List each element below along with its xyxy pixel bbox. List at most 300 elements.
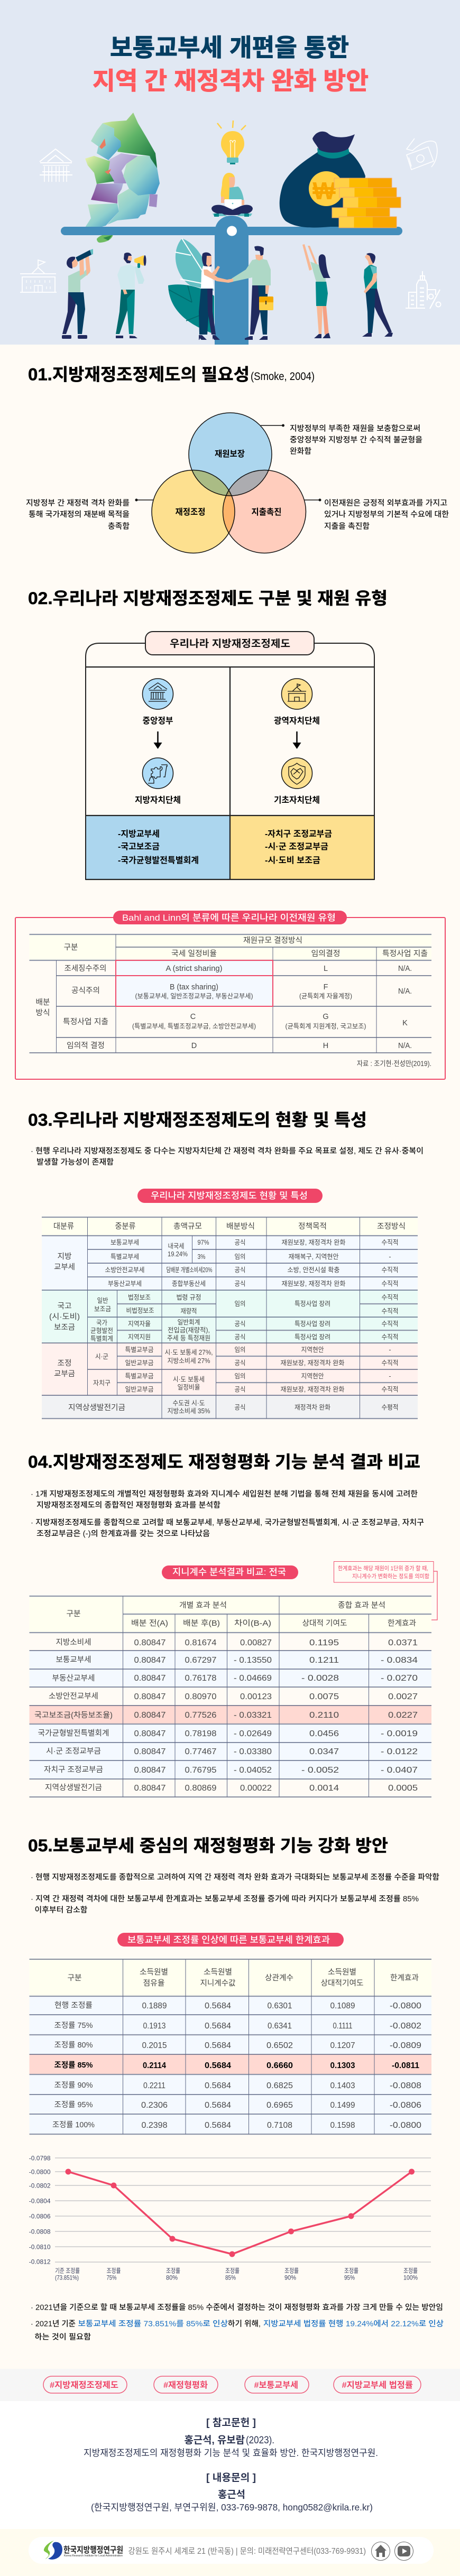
row: 자치구 조정교부금: 0.76795: [185, 1766, 217, 1775]
y axis labels: -0.0806: [29, 2212, 51, 2220]
text block: section 4 description: · 1개 지방재정조정제도의 개별적인 재정형평화 효과와 지니계수 세입원천 분해 기법을 통해 전체 재원을 동시에 고려한: [31, 1489, 418, 1499]
callout: 지출촉진 description: [304, 499, 449, 531]
x axis labels: [55, 2267, 418, 2281]
panel header pill: [113, 911, 347, 924]
row: 조정률 90%: 0.6825: [266, 2081, 293, 2090]
table cells: L: [324, 965, 328, 973]
row: 시·군 조정교부금: 시·군 조정교부금: [46, 1747, 101, 1756]
venn labels: 재원보장: [215, 449, 245, 459]
group: 국고보조금: 특정사업 장려: [295, 1300, 330, 1308]
table header: 배분 전(A): [131, 1619, 168, 1628]
callout: 재정조정 description: 충족함: [108, 522, 130, 531]
row headers: 조세징수주의: [65, 964, 107, 973]
table cells: [132, 965, 412, 1050]
row headers: [36, 964, 108, 1050]
footer: [0, 2529, 460, 2576]
icon: metropolitan government: [281, 679, 312, 709]
callout: 지출촉진 description: 이전재원은 긍정적 외부효과를 가지고: [324, 499, 447, 507]
table header: [67, 1601, 416, 1628]
title: [93, 34, 369, 95]
table cells: H: [323, 1042, 328, 1050]
fill: left funding list: [86, 816, 230, 879]
row: 지방소비세: 0.81674: [185, 1638, 217, 1647]
row: 조정률 75%: 0.1913: [143, 2022, 166, 2031]
text block: section 5 description: · 현행 지방재정조정제도를 종합적으로 고려하여 지역 간 재정력 격차 완화 효과가 극대화되는 보통교부세 조정률 수준을 파악함: [31, 1873, 439, 1882]
table: transfer types: [30, 934, 431, 1053]
table header: 차이(B-A): [234, 1619, 271, 1628]
row: 소방안전교부세: [49, 1692, 418, 1701]
row: 국가균형발전특별회계: 0.0456: [309, 1729, 339, 1738]
list: national funding: [118, 829, 199, 865]
row: 소방안전교부세: 0.0075: [309, 1692, 339, 1701]
group: 지역상생발전기금: 수평적: [382, 1404, 399, 1411]
text block: section 4 description: [31, 1489, 424, 1538]
group: 지방교부세: 수직적: [382, 1266, 399, 1274]
group: 조정교부금: 지역현안: [301, 1373, 324, 1380]
group: 지방교부세: 19.24%: [168, 1250, 188, 1258]
hashtag: 재정형평화: #재정형평화: [163, 2380, 208, 2390]
group: 지역상생발전기금: [68, 1400, 399, 1415]
row: 지방소비세: 0.00827: [240, 1638, 272, 1647]
hashtag: 지방교부세 법정률: #지방교부세 법정률: [342, 2380, 413, 2390]
table header: 상대적기여도: [320, 1979, 364, 1988]
row: 조정률 85% highlighted: 0.2114: [143, 2061, 166, 2070]
table header: 상대적 기여도: [302, 1619, 347, 1628]
row: 현행 조정률: -0.0800: [390, 2002, 421, 2010]
row: 조정률 95%: 0.5684: [205, 2101, 231, 2110]
group: 조정교부금: 공식: [235, 1359, 245, 1367]
row: 보통교부세: - 0.0834: [381, 1656, 418, 1665]
table: Gini analysis results: [30, 1596, 431, 1797]
text block: section 3 description: · 현행 우리나라 지방재정조정제도 중 다수는 지방자치단체 간 재정력 격차 완화를 주요 목표로 설정, 제도 간 유사·중복이: [31, 1147, 424, 1155]
row: 조정률 75%: 0.5684: [205, 2022, 231, 2031]
hashtag: 보통교부세: [245, 2376, 309, 2393]
group: 조정교부금: 특별교부금: [125, 1373, 153, 1380]
section 1 heading: 01.지방재정조정제도의 필요성: [28, 365, 250, 384]
group: 지방교부세: 공식: [235, 1239, 245, 1246]
row: 소방안전교부세: 소방안전교부세: [49, 1692, 98, 1701]
hashtag: 지방재정조정제도: #지방재정조정제도: [50, 2380, 118, 2390]
y axis labels: -0.0812: [29, 2258, 51, 2265]
pill heading: adjustment rate effect: [117, 1933, 344, 1947]
group: 국고보조금: 특정사업 장려: [295, 1333, 330, 1341]
table header: 배분 후(B): [183, 1619, 220, 1628]
list: national funding: -국가균형발전특별회계: [118, 856, 199, 865]
map of Korea: [85, 113, 160, 243]
row: 조정률 100%: 0.5684: [205, 2121, 231, 2130]
group: 조정교부금: -: [389, 1346, 391, 1354]
row: 현행 조정률: 현행 조정률: [54, 2001, 93, 2010]
group: 지역상생발전기금: 공식: [235, 1404, 245, 1411]
table header: 한계효과: [390, 1973, 419, 1982]
row: 지방소비세: 0.1195: [309, 1638, 339, 1647]
row: 현행 조정률: [54, 2001, 421, 2010]
row: 시·군 조정교부금: 0.77467: [185, 1747, 217, 1756]
scale post and beam: [61, 216, 402, 345]
table header: 한계효과: [388, 1619, 416, 1628]
panel: fiscal adjustment system diagram: [86, 632, 374, 879]
hashtag: 보통교부세: #보통교부세: [254, 2380, 298, 2390]
table header: 구분: [68, 1974, 81, 1982]
logo text: 한국지방행정연구원: [63, 2545, 123, 2555]
y axis labels: -0.0804: [29, 2198, 51, 2205]
text block: conclusions: 하기 위해,: [228, 2319, 261, 2329]
y axis labels: -0.0810: [29, 2243, 51, 2250]
table cells: (특별교부세, 특별조정교부금, 소방안전교부세): [132, 1023, 256, 1030]
page background: [0, 345, 460, 2369]
reference citation: (2023).: [246, 2435, 274, 2446]
callout: 지출촉진 description: 있거나 지방정부의 기본적 수요에 대한: [324, 510, 449, 519]
row: 조정률 85% highlighted: 0.5684: [205, 2061, 231, 2070]
x axis labels: 조정률: [344, 2267, 358, 2275]
table cells: (균특회계 자율계정): [299, 993, 352, 1000]
row: 시·군 조정교부금: - 0.03380: [234, 1747, 272, 1756]
table header text: 구분: [63, 943, 78, 952]
logo text: Korea Research Institute for Local Administration: [64, 2554, 123, 2558]
icon: government building outline: [40, 149, 72, 182]
row: 부동산교부세: 0.76178: [185, 1674, 217, 1683]
section 4 heading: 04.지방재정조정제도 재정형평화 기능 분석 결과 비교: [28, 1452, 420, 1471]
group: 국고보조금: 임의: [235, 1300, 245, 1308]
group: 조정교부금: 일반교부금: [125, 1359, 153, 1367]
group: 조정교부금: 시·군: [95, 1353, 108, 1360]
row: 현행 조정률: 0.1089: [330, 2002, 355, 2010]
row: 지역상생발전기금: [45, 1783, 418, 1793]
title: 보통교부세 개편을 통한: [110, 34, 349, 61]
row: 조정률 75%: [54, 2021, 421, 2031]
row: 조정률 95%: -0.0806: [390, 2101, 421, 2110]
row: 부동산교부세: [52, 1674, 418, 1683]
group: 지방교부세: 공식: [235, 1280, 245, 1287]
row: 조정률 90%: 0.1403: [330, 2081, 355, 2090]
table header row: 조정방식: [377, 1222, 406, 1231]
venn labels: 재정조정: [176, 507, 205, 517]
x axis labels: 80%: [166, 2274, 178, 2281]
row: 조정률 80%: 0.1207: [330, 2041, 355, 2050]
row: 조정률 95%: 0.1499: [330, 2101, 355, 2110]
table header: 개별 효과 분석: [179, 1601, 227, 1610]
group: 지역상생발전기금: 지역상생발전기금: [68, 1403, 125, 1412]
group: 조정교부금: 특별교부금: [125, 1346, 153, 1354]
hero background: [0, 0, 460, 345]
pill heading: adjustment rate effect: 보통교부세 조정률 인상에 따른 보통교부세 한계효과: [127, 1935, 330, 1945]
venn diagram: [152, 413, 306, 553]
text block: section 3 description: 발생할 가능성이 존재함: [36, 1157, 114, 1167]
contact details: (한국지방행정연구원, 부연구위원, 033-769-9878, hong0582@krila.re.kr): [91, 2502, 373, 2513]
row: 조정률 80%: 0.6502: [266, 2041, 293, 2050]
table cells: (균특회계 지원계정, 국고보조): [286, 1023, 366, 1030]
group: 국고보조금: 재량적: [181, 1308, 197, 1315]
arrow: metropolitan to basic: [293, 731, 301, 749]
row: 국고보조금 highlighted: 국고보조금(차등보조율): [34, 1711, 113, 1720]
y axis labels: -0.0802: [29, 2182, 51, 2189]
coin bricks: [332, 178, 401, 228]
fill: right funding list: [230, 816, 374, 879]
callout: 재정조정 description: 통해 국가재정의 재분배 목적을: [29, 510, 130, 519]
group: 조정교부금: 시·도 보통세: [173, 1376, 205, 1383]
row: 지역상생발전기금: 0.80869: [185, 1784, 217, 1793]
row: 조정률 85% highlighted: 0.6660: [266, 2061, 293, 2070]
row headers: 특정사업 지출: [63, 1017, 108, 1026]
label: basic government: 기초자치단체: [274, 795, 320, 805]
group: 국고보조금: 특정사업 장려: [295, 1320, 330, 1328]
pill heading: system status: [137, 1189, 323, 1203]
row: 국고보조금 highlighted: - 0.03321: [234, 1711, 272, 1720]
y axis labels: -0.0798: [29, 2154, 51, 2162]
row: 조정률 95%: 0.6965: [266, 2101, 293, 2110]
group: 국고보조금: (시·도비): [49, 1312, 80, 1321]
table cells: N/A.: [398, 965, 412, 973]
row: 국가균형발전특별회계: 0.78198: [185, 1729, 217, 1738]
x axis labels: 100%: [403, 2274, 418, 2281]
table header text: 특정사업 지출: [382, 949, 428, 958]
table header row: 총액규모: [173, 1222, 202, 1231]
row: 조정률 100%: -0.0800: [390, 2121, 421, 2130]
row: 현행 조정률: 0.6301: [268, 2002, 292, 2010]
person: man with megaphone: [116, 253, 146, 338]
section 5 heading: 05.보통교부세 중심의 재정형평화 기능 강화 방안: [28, 1836, 388, 1855]
text block: section 5 description: · 지역 간 재정력 격차에 대한 보통교부세 한계효과는 보통교부세 조정률 증가에 따라 커지다가 보통교부세 조정률 85%: [31, 1894, 419, 1904]
group: 지방교부세: 종합부동산세: [172, 1280, 206, 1287]
row: 조정률 100%: 0.2398: [142, 2121, 168, 2130]
row: 부동산교부세: - 0.04669: [234, 1674, 272, 1683]
group: 지방교부세: 3%: [198, 1253, 205, 1261]
section 3 heading: 03.우리나라 지방재정조정제도의 현황 및 특성: [28, 1110, 367, 1129]
group: 국고보조금: 전입금(재량적),: [168, 1327, 210, 1334]
icon: home button: [371, 2542, 390, 2560]
table header: 소득원별: [140, 1968, 168, 1977]
group: 국고보조금: 보조금: [94, 1305, 111, 1313]
money bag with coin stack: ₩: [312, 177, 336, 205]
group: 조정교부금: 수직적: [382, 1386, 399, 1393]
row: 조정률 90%: -0.0808: [390, 2081, 421, 2090]
group: 지방교부세: 공식: [235, 1266, 245, 1274]
table header: 종합 효과 분석: [338, 1601, 385, 1610]
row: 보통교부세: - 0.13550: [234, 1656, 272, 1665]
row: 부동산교부세: 부동산교부세: [52, 1674, 95, 1683]
group: 조정교부금: 일반교부금: [125, 1386, 153, 1393]
row: 조정률 80%: [54, 2041, 421, 2050]
row: 조정률 75%: 0.1111: [333, 2022, 353, 2031]
hashtag: 지방교부세 법정률: [334, 2376, 421, 2393]
x axis labels: 85%: [225, 2274, 236, 2281]
person: man with briefcase: [227, 246, 273, 340]
table header text: 임의결정: [311, 949, 341, 958]
row: 조정률 95%: [54, 2100, 421, 2110]
leaves behind the post: [168, 238, 214, 334]
table header row: [53, 1222, 406, 1231]
row: 시·군 조정교부금: 0.80847: [134, 1747, 166, 1756]
row: 국가균형발전특별회계: 국가균형발전특별회계: [38, 1729, 109, 1738]
callout: 지출촉진 description: 지출을 촉진함: [324, 522, 370, 531]
row: 국고보조금 highlighted: 0.0227: [388, 1711, 418, 1720]
group: 지방교부세: 소방, 안전시설 확충: [288, 1266, 339, 1274]
venn labels: 지출촉진: [252, 507, 281, 517]
x axis labels: 조정률: [166, 2267, 180, 2275]
group: 조정교부금: 재원보장, 재정격차 완화: [280, 1359, 345, 1367]
table header text: [63, 936, 428, 958]
row: 국가균형발전특별회계: [38, 1729, 418, 1738]
hashtag: 재정형평화: [154, 2376, 218, 2393]
data line: [66, 2169, 415, 2257]
table cells: K: [402, 1019, 408, 1027]
row: 자치구 조정교부금: 자치구 조정교부금: [44, 1765, 103, 1774]
list: regional funding: -시·군 조정교부금: [265, 842, 328, 851]
y axis labels: [29, 2154, 51, 2265]
table header: 구분: [67, 1610, 80, 1618]
icon: local government puzzle: [143, 758, 173, 789]
row: 보통교부세: 보통교부세: [56, 1655, 91, 1664]
row: 자치구 조정교부금: 0.80847: [134, 1766, 166, 1775]
table cells: G: [323, 1013, 329, 1021]
row: 조정률 80%: -0.0809: [390, 2041, 421, 2050]
group: 조정교부금: 재원보장, 재정격차 완화: [280, 1386, 345, 1393]
group: 지방교부세: 보통교부세: [111, 1239, 139, 1246]
reference citation: 홍근석, 유보람: [184, 2434, 245, 2446]
row: 조정률 95%: 조정률 95%: [54, 2100, 93, 2109]
line chart: marginal effect: [29, 2154, 431, 2281]
x axis labels: 조정률: [225, 2267, 240, 2275]
group: 조정교부금: 교부금: [54, 1370, 75, 1378]
text block: section 3 description: [31, 1147, 424, 1167]
callout: 재정조정 description: [26, 499, 153, 531]
table: marginal effect by adjustment rate: [30, 1959, 431, 2134]
row: 조정률 90%: 0.2211: [143, 2081, 165, 2090]
row: 조정률 90%: 조정률 90%: [54, 2081, 93, 2090]
row: 국가균형발전특별회계: 0.80847: [134, 1729, 166, 1738]
circle: 재원보장: [189, 413, 272, 496]
source note: 자료 : 조기현·전성만(2019).: [357, 1060, 431, 1068]
row: 자치구 조정교부금: - 0.04052: [234, 1766, 272, 1775]
table header row: 배분방식: [226, 1222, 255, 1231]
group: 지방교부세: 임의: [235, 1253, 245, 1261]
pill heading: system status: 우리나라 지방재정조정제도 현황 및 특성: [151, 1191, 308, 1201]
group: 국고보조금: 수직적: [382, 1320, 399, 1328]
row: 보통교부세: 0.80847: [134, 1656, 166, 1665]
group: 지방교부세: 재원보장, 재정격차 완화: [281, 1280, 346, 1287]
logo text: [63, 2545, 123, 2558]
row: 소방안전교부세: 0.00123: [240, 1692, 272, 1701]
row: 소방안전교부세: 0.0027: [388, 1692, 418, 1701]
arrow: central to local: [153, 731, 162, 749]
hashtag: 지방재정조정제도: [43, 2376, 127, 2393]
x axis labels: 기준 조정률: [55, 2267, 80, 2275]
group: 조정교부금: 공식: [235, 1386, 245, 1393]
table cells: A (strict sharing): [166, 965, 222, 973]
references heading: [ 참고문헌 ]: [206, 2417, 256, 2429]
pill heading: Gini comparison: [162, 1565, 298, 1579]
group: 국고보조금: 일반: [97, 1297, 108, 1304]
row: 조정률 80%: 조정률 80%: [54, 2041, 93, 2050]
group: 국고보조금: 국고: [57, 1302, 72, 1311]
group: 지방교부세: 지방: [57, 1252, 72, 1261]
group: 조정교부금: 지역현안: [301, 1346, 324, 1354]
group: 조정교부금: 임의: [235, 1346, 245, 1354]
row: 조정률 75%: -0.0802: [390, 2022, 421, 2031]
group: 조정교부금: [54, 1346, 399, 1393]
table cells: D: [191, 1042, 197, 1050]
contact details: 홍근석: [218, 2489, 245, 2500]
group: 국고보조금: 수직적: [382, 1308, 399, 1315]
callout: 재원보장 description: 중앙정부와 지방정부 간 수직적 불균형을: [290, 435, 422, 444]
group: 국고보조금: 지역자율: [128, 1320, 151, 1328]
reference citation: [84, 2434, 378, 2458]
section 2 heading: 02.우리나라 지방재정조정제도 구분 및 재원 유형: [28, 589, 388, 608]
person: woman raising arms: [302, 244, 330, 338]
row: 보통교부세: 0.67297: [185, 1656, 217, 1665]
group: 지방교부세: 수직적: [382, 1239, 399, 1246]
table header row: 중분류: [115, 1222, 135, 1231]
table header: 점유율: [143, 1979, 165, 1988]
group: 조정교부금: 일정비율: [178, 1384, 200, 1391]
row: 국고보조금 highlighted: 0.2110: [309, 1711, 339, 1720]
row: 조정률 90%: 0.5684: [205, 2081, 231, 2090]
diagram title pill: [145, 632, 314, 655]
row: 현행 조정률: 0.1889: [142, 2002, 167, 2010]
row: 조정률 95%: 0.2306: [141, 2101, 168, 2110]
group: 국고보조금: 수직적: [382, 1333, 399, 1341]
row: 조정률 85% highlighted: -0.0811: [392, 2061, 419, 2070]
pill heading: Gini comparison: 지니계수 분석결과 비교: 전국: [172, 1567, 286, 1577]
table header: [68, 1968, 419, 1988]
row: 부동산교부세: - 0.0270: [381, 1674, 418, 1683]
table header: 지니계수값: [200, 1979, 236, 1988]
group: 국고보조금: 공식: [235, 1333, 245, 1341]
y axis labels: -0.0800: [29, 2168, 51, 2175]
list: national funding: -지방교부세: [118, 829, 160, 839]
row: 자치구 조정교부금: [44, 1765, 418, 1775]
callout: marginal effect note: 한계효과는 해당 재원이 1단위 증가 할 때,: [338, 1564, 428, 1572]
group: 국고보조금: 보조금: [54, 1323, 75, 1332]
group: 국고보조금: 수직적: [382, 1294, 399, 1301]
row: 조정률 100%: 0.7108: [267, 2121, 292, 2130]
person: woman shaking hands: [199, 253, 229, 340]
text block: conclusions: · 2021년 기준: [31, 2319, 76, 2329]
row: 조정률 75%: 조정률 75%: [54, 2021, 93, 2030]
list: regional funding: -시·도비 보조금: [265, 856, 320, 865]
row: 현행 조정률: 0.5684: [205, 2002, 231, 2010]
contact heading: [ 내용문의 ]: [206, 2472, 256, 2484]
row: 국고보조금 highlighted: [34, 1711, 418, 1720]
diagram title pill: 우리나라 지방재정조정제도: [170, 638, 290, 650]
icon: central government: [143, 679, 173, 709]
group: 지방교부세: 담배분 개별소비세20%: [166, 1266, 213, 1274]
group: 국고보조금: 특별회계: [90, 1335, 113, 1342]
row: 지역상생발전기금: 0.00022: [240, 1784, 272, 1793]
panel header pill: Bahl and Linn의 분류에 따른 우리나라 이전재원 유형: [122, 913, 336, 923]
row: 조정률 85% highlighted: 0.1303: [330, 2061, 355, 2070]
table cells: N/A.: [398, 987, 412, 996]
row: 지방소비세: 지방소비세: [56, 1638, 91, 1647]
row: 자치구 조정교부금: - 0.0052: [301, 1766, 339, 1775]
callout: 재원보장 description: 완화함: [290, 447, 311, 456]
group: 국고보조금: 비법정보조: [126, 1307, 154, 1314]
person: man standing: [362, 253, 393, 337]
row: 보통교부세: [56, 1655, 418, 1665]
group: 지방교부세: 소방안전교부세: [105, 1266, 145, 1274]
icon: city buildings outline: [406, 271, 441, 309]
logo mark: [44, 2541, 62, 2560]
section 1 heading: (Smoke, 2004): [251, 370, 315, 383]
group: 조정교부금: 수직적: [382, 1359, 399, 1367]
table header row: 대분류: [53, 1222, 74, 1231]
circle: 지출촉진: [223, 470, 306, 553]
list: national funding: -국고보조금: [118, 842, 160, 851]
table cells: F: [324, 983, 328, 992]
row: 시·군 조정교부금: 0.0347: [309, 1747, 339, 1756]
group: 조정교부금: 조정: [57, 1359, 72, 1368]
reference citation: 지방재정조정제도의 재정형평화 기능 분석 및 효율화 방안. 한국지방행정연구원.: [84, 2448, 378, 2458]
